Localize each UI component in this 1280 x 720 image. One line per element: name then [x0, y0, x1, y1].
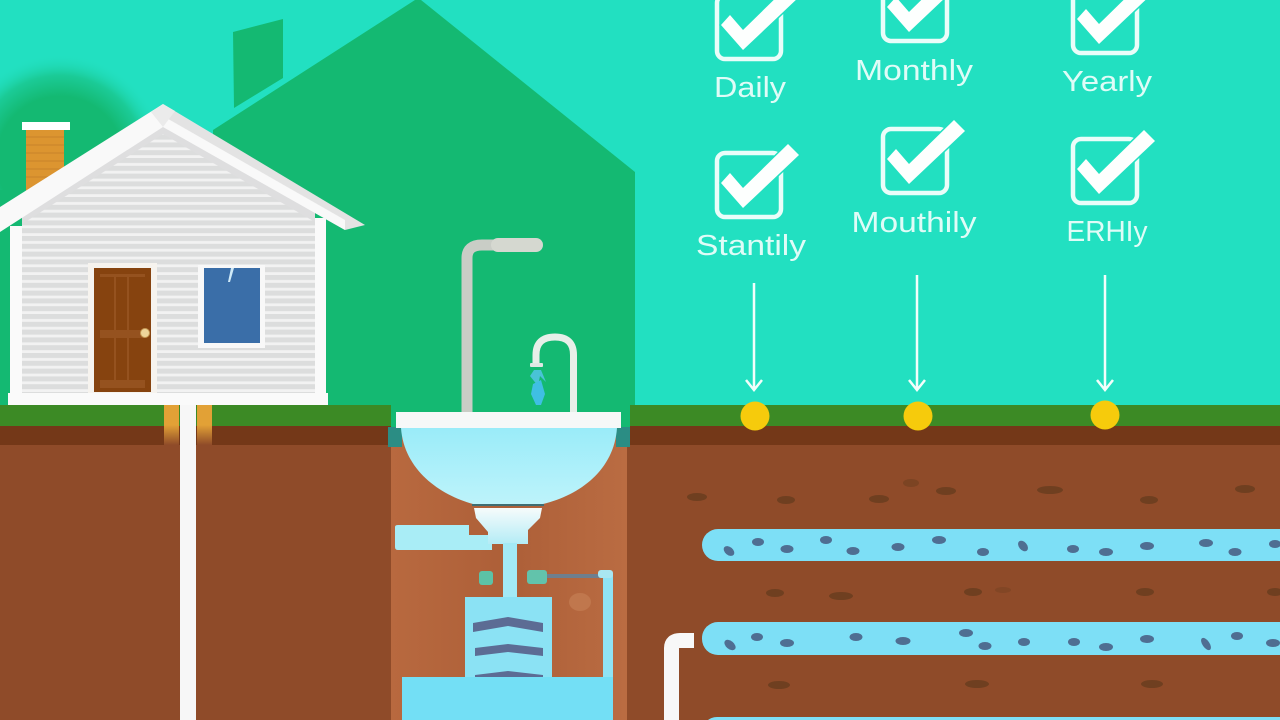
- item: Mouthily: Mouthily: [852, 207, 977, 239]
- drain pipe 1 with sediment: [702, 529, 1280, 561]
- ground: [0, 405, 1280, 720]
- item: Erhly: ERHIy: [1066, 216, 1148, 248]
- checklist: [696, 0, 1155, 262]
- house foundation posts and white pipe: [164, 405, 212, 720]
- arrow 1: [746, 283, 762, 390]
- white inlet pipe: [672, 640, 694, 720]
- sink: [396, 412, 621, 506]
- item: Daily: [714, 0, 799, 104]
- grass: [0, 405, 1280, 426]
- filter tank: [465, 597, 552, 678]
- side pipe: [395, 525, 492, 550]
- right riser: [603, 574, 613, 678]
- soil speckles: [687, 479, 1280, 689]
- trap: [474, 508, 542, 544]
- valve left: [479, 571, 493, 585]
- wall trim: [8, 218, 328, 405]
- drain pipe 2 with sediment: [702, 622, 1280, 655]
- door: [88, 263, 157, 393]
- item: Stantily: Stantily: [696, 230, 807, 262]
- item: Stantily: [696, 144, 807, 262]
- soil: [0, 445, 1280, 720]
- item: Daily: Daily: [714, 72, 787, 104]
- item: Monthly top: Monthly: [855, 55, 974, 87]
- countertop: [396, 412, 621, 428]
- item: Mouthily: [852, 120, 977, 239]
- roof: [0, 104, 365, 232]
- gray connector: [547, 574, 601, 578]
- item: Yearly: Yearly: [1062, 66, 1153, 98]
- drain pipe 3: [702, 717, 1280, 720]
- water drops: [530, 370, 546, 405]
- central soil column: [388, 405, 630, 720]
- house: [0, 104, 365, 405]
- water reservoir: [402, 677, 613, 720]
- item: Monthly top: [855, 0, 974, 87]
- left hill blob: [0, 54, 166, 266]
- siding wall: [22, 134, 315, 393]
- arrow 3: [1097, 275, 1113, 390]
- marker dots: [740, 400, 1120, 430]
- basin: [401, 428, 617, 504]
- soil stain: [569, 593, 591, 611]
- drain trap and pipes: [395, 508, 613, 678]
- item: Erhly: [1066, 130, 1155, 248]
- valve right: [527, 570, 547, 584]
- faucet: [530, 337, 574, 412]
- large green house silhouette: [0, 0, 635, 420]
- soffit backing: [22, 120, 315, 395]
- chimney: [22, 122, 70, 192]
- arrow 2: [909, 275, 925, 390]
- street lamp: [467, 238, 543, 412]
- window: [198, 265, 265, 348]
- vertical pipe: [503, 543, 517, 599]
- item: Yearly: [1062, 0, 1155, 98]
- dark topsoil: [0, 426, 1280, 445]
